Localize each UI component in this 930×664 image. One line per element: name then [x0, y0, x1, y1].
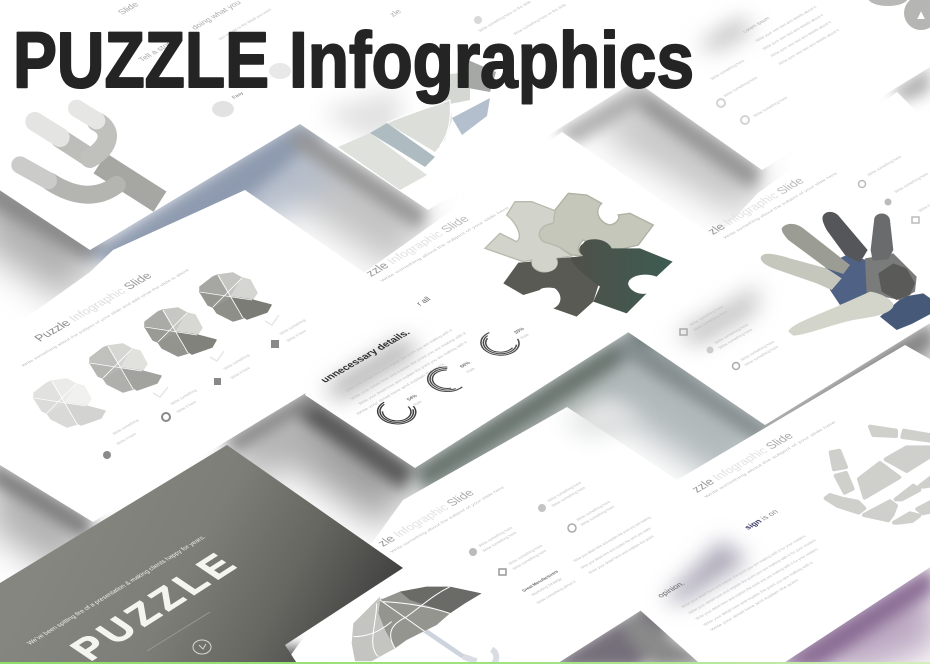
slide subtitle: Write something about the subject of your slide and add what the slide is about — [20, 267, 191, 368]
canopy left — [352, 597, 395, 661]
umbrella graphic — [352, 587, 496, 664]
icons and text: Write your detail here and explain the point you make — [579, 526, 653, 570]
chart labels — [406, 326, 531, 407]
chart labels: Rate — [465, 366, 477, 374]
slide: top left text: Tell a story — [136, 39, 177, 63]
finger 1 — [761, 254, 842, 290]
finger 4 — [871, 214, 893, 261]
icons and text: Write your detail here and explain the point you are making — [572, 515, 652, 563]
body text: Write your detail here and explain the point — [709, 578, 800, 632]
octagon — [878, 263, 915, 300]
icons and text: Write your detail here and explain the point — [587, 534, 656, 575]
body text: Write your detail here and explain the point you are making with it — [702, 560, 815, 627]
cover headline: PUZZLE — [62, 548, 245, 664]
slide: top right text block — [709, 5, 841, 124]
slide title: zzle Infographic Slide — [688, 430, 797, 495]
icons and bullet text: Write something here — [688, 304, 725, 327]
donut chart 1 — [370, 394, 424, 429]
slide title: Puzzle Infographic Slide — [31, 270, 155, 344]
slide: top centre hand: zle — [387, 8, 404, 18]
icons and labels: Write it here — [175, 399, 198, 414]
slide subtitle: Write something about the subject of your slide here — [703, 419, 838, 499]
icons and text: Write something here — [575, 499, 612, 522]
icon: top right badge — [868, 0, 930, 30]
head 4 — [200, 273, 271, 321]
icons and text: Great Manufacturers — [521, 569, 560, 593]
panel: hand outline slide — [655, 419, 930, 632]
slide: top right text block: Write your own text and details about it — [761, 13, 825, 51]
cover tagline: We've been spitting fire of a presentation & making clients happy for years. — [26, 534, 208, 646]
icons and text: Write something here — [550, 485, 587, 508]
panel: hand slide — [680, 154, 930, 370]
chart labels: 66% — [459, 360, 473, 369]
body text: Write your detail here and explain the point you are making with it — [344, 328, 454, 393]
slide: top right text block: Write your own text and details about it — [769, 20, 833, 58]
icons and labels — [103, 318, 308, 459]
handle — [463, 649, 496, 664]
icons and text: Write something here — [507, 543, 544, 566]
slide title: zzle Infographic Slide — [362, 213, 472, 279]
body text: Write your detail here and explain the point you are making with it for your readers — [687, 538, 817, 615]
body text: Write your detail here and explain the point — [355, 362, 446, 416]
panel: central puzzle slide — [318, 193, 673, 429]
heading continued: opinion. — [655, 580, 687, 599]
slide: top right text block: Lorem ipsum — [742, 16, 772, 34]
title — [13, 15, 694, 104]
icons and bullet text: Write something here — [739, 339, 776, 362]
slide: top left text — [115, 0, 291, 117]
slide: top right text block: Write something here — [722, 75, 759, 98]
slide title: zle Infographic Slide — [704, 175, 808, 237]
slide subtitle: Write something about the subject of your slide here — [722, 171, 839, 240]
canopy right — [400, 587, 482, 613]
icons and text: Write something here — [579, 504, 616, 527]
body text: Write your detail here and explain the point you are making with it for your readers — [680, 534, 807, 609]
chart labels: 35% — [513, 326, 527, 335]
head 1 — [34, 379, 105, 427]
body text: Write your detail here and explain the point you are making with it for your readers — [694, 547, 819, 621]
title: PUZZLE — [13, 15, 269, 104]
panel: umbrella slide — [352, 480, 656, 664]
head 2 — [90, 344, 161, 392]
icons and labels: Write something — [278, 318, 307, 336]
hand outline graphic — [826, 427, 930, 523]
icons and bullet text: Write something here — [743, 344, 780, 367]
icons and labels: Write it here — [285, 328, 308, 343]
thumb — [788, 292, 893, 336]
slide: top centre hand — [338, 0, 568, 190]
icons and labels: Write something — [222, 353, 251, 371]
icons and bullet text: Write something here — [893, 171, 930, 194]
chart labels: Rate — [519, 332, 531, 340]
chart labels: Rate — [412, 399, 424, 407]
hand graphic — [761, 212, 930, 336]
icons and text: Marketing Strategy — [530, 577, 563, 597]
donut chart 3 — [473, 326, 527, 360]
slide: top left text: Easy — [231, 91, 246, 100]
piece: dark grey — [503, 257, 600, 317]
piece: light — [485, 202, 572, 273]
cover rule — [147, 612, 210, 651]
icons and text: Write something here — [477, 525, 514, 548]
chart labels: 54% — [406, 393, 420, 402]
chevrons — [153, 315, 279, 397]
icons and text: Write something here — [546, 480, 583, 503]
icons and bullet text: Write something here — [713, 322, 750, 345]
panel: dark cover slide — [0, 445, 403, 664]
bottom accent bar — [0, 662, 930, 664]
title: Infographics — [289, 15, 694, 104]
icons and labels: Write it here — [115, 431, 138, 446]
bold heading: unnecessary details. — [318, 328, 413, 385]
icons and labels: Write something — [111, 418, 140, 436]
slide: top left text: you can get to the detail you want — [217, 7, 273, 41]
icons and bullet text: Write something here — [717, 327, 754, 350]
slide: top right text block: Write your own text and details about it — [777, 28, 841, 66]
wrist — [880, 293, 930, 330]
palm grey — [865, 253, 917, 300]
icons and labels: Write it here — [229, 365, 252, 380]
slide: top right text block: Write your own text and details about it — [754, 5, 818, 43]
panel: puzzle heads slide — [20, 267, 308, 459]
seams — [353, 587, 452, 657]
heading: sign is on — [742, 508, 780, 531]
slide subtitle: Write something about the subject of your slide here — [389, 485, 506, 554]
canopy middle — [378, 587, 450, 648]
head 3 — [145, 308, 216, 356]
slide: top left text: Slide — [115, 0, 141, 16]
slide: top right text block: Write something here — [709, 58, 746, 81]
piece: sage — [539, 193, 653, 256]
body text — [344, 328, 469, 416]
finger 3 — [822, 212, 868, 263]
icons and bullet text — [680, 154, 930, 370]
slide: top left hand — [20, 108, 160, 202]
piece: dark green — [570, 239, 673, 313]
slide: top centre hand: Write something here on the slide — [477, 0, 533, 33]
finger 2 — [782, 224, 850, 274]
donut chart 2 — [420, 362, 474, 397]
palm blue — [825, 255, 868, 305]
cover background — [0, 445, 403, 664]
icons and bullet text: Write something here — [866, 154, 903, 177]
icons and text: Write something about it — [535, 579, 578, 605]
soft shadows across slides — [320, 18, 760, 604]
icons and bullet text: Write something here — [692, 309, 729, 332]
slide subtitle: Write something about the subject of your slide here — [379, 205, 511, 283]
icon: cover circle — [193, 640, 211, 654]
icons and labels: Write something — [169, 388, 198, 406]
slide: top centre hand: Write something here on the slide — [512, 2, 568, 36]
body text: Write your detail here and explain the point you are making with it — [357, 340, 469, 406]
pole — [380, 600, 463, 657]
icons and text: Write something here — [511, 548, 548, 571]
heading: r all — [414, 295, 433, 307]
jigsaw puzzle — [485, 193, 673, 317]
slide: top right text block: Write something here — [752, 95, 789, 118]
slide title: zle Infographic Slide — [374, 487, 478, 549]
body text: Write your detail here and explain the point you are making with it — [349, 331, 468, 401]
icons and text: Write something here — [481, 530, 518, 553]
icon: top right badge: ▲ — [915, 7, 927, 22]
icons and text — [469, 480, 656, 605]
